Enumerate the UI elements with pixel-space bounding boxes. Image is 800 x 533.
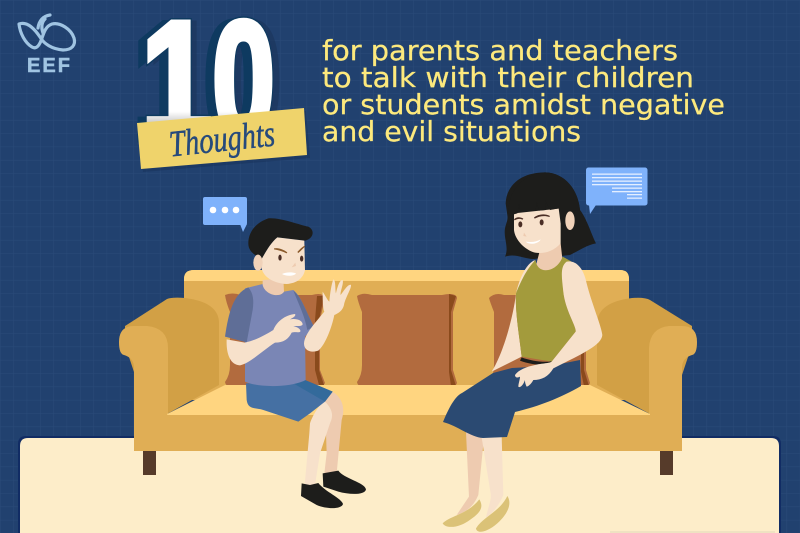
mother body — [492, 243, 576, 372]
headline text: to talk with their children — [322, 61, 694, 94]
sofa — [119, 270, 697, 475]
boy face — [262, 237, 305, 284]
icon: butterfly — [19, 15, 75, 50]
mother legs — [443, 432, 509, 532]
mother eyes and brows — [514, 214, 550, 237]
speech bubble: boy — [203, 197, 247, 232]
boy upper body and head — [225, 218, 351, 386]
mother shoes — [443, 499, 481, 527]
mother head — [509, 172, 580, 253]
headline text — [322, 34, 725, 148]
banner: Thoughts: Thoughts — [167, 114, 277, 165]
mother arm and hand — [515, 261, 602, 387]
sofa right arm — [597, 298, 697, 430]
mother ear — [565, 211, 575, 230]
headline text: for parents and teachers — [322, 34, 678, 67]
boy hair — [248, 218, 313, 259]
sofa legs — [143, 451, 673, 475]
mother mouth — [526, 239, 541, 244]
mother fringe — [509, 172, 580, 223]
floor panel — [18, 436, 781, 533]
headline text: and evil situations — [322, 115, 581, 148]
logo wordmark: EEF — [27, 55, 70, 77]
speech bubble: mother — [586, 168, 648, 214]
sofa back — [184, 270, 629, 400]
boy legs and shoes — [301, 392, 366, 508]
sofa seat and base — [134, 385, 682, 451]
boy shorts — [246, 380, 333, 422]
floor shadow — [610, 531, 775, 533]
boy raised arm and hand — [304, 279, 351, 352]
headline text: or students amidst negative — [322, 88, 725, 121]
character: mother — [443, 172, 602, 532]
cushion: right — [489, 294, 590, 387]
mother hair back — [505, 172, 596, 259]
logo: EEF — [19, 15, 75, 77]
boy ear — [253, 255, 263, 271]
boy mouth — [282, 272, 296, 276]
boy eyes and brows — [274, 246, 305, 267]
cushion: center — [357, 294, 457, 387]
boy arm near chest — [227, 314, 303, 365]
cushion: left — [225, 294, 325, 387]
sofa left arm — [119, 298, 219, 430]
character: boy — [225, 218, 366, 508]
boy neck — [263, 278, 284, 295]
mother skirt — [443, 360, 581, 438]
title number: 10 — [133, 0, 282, 173]
